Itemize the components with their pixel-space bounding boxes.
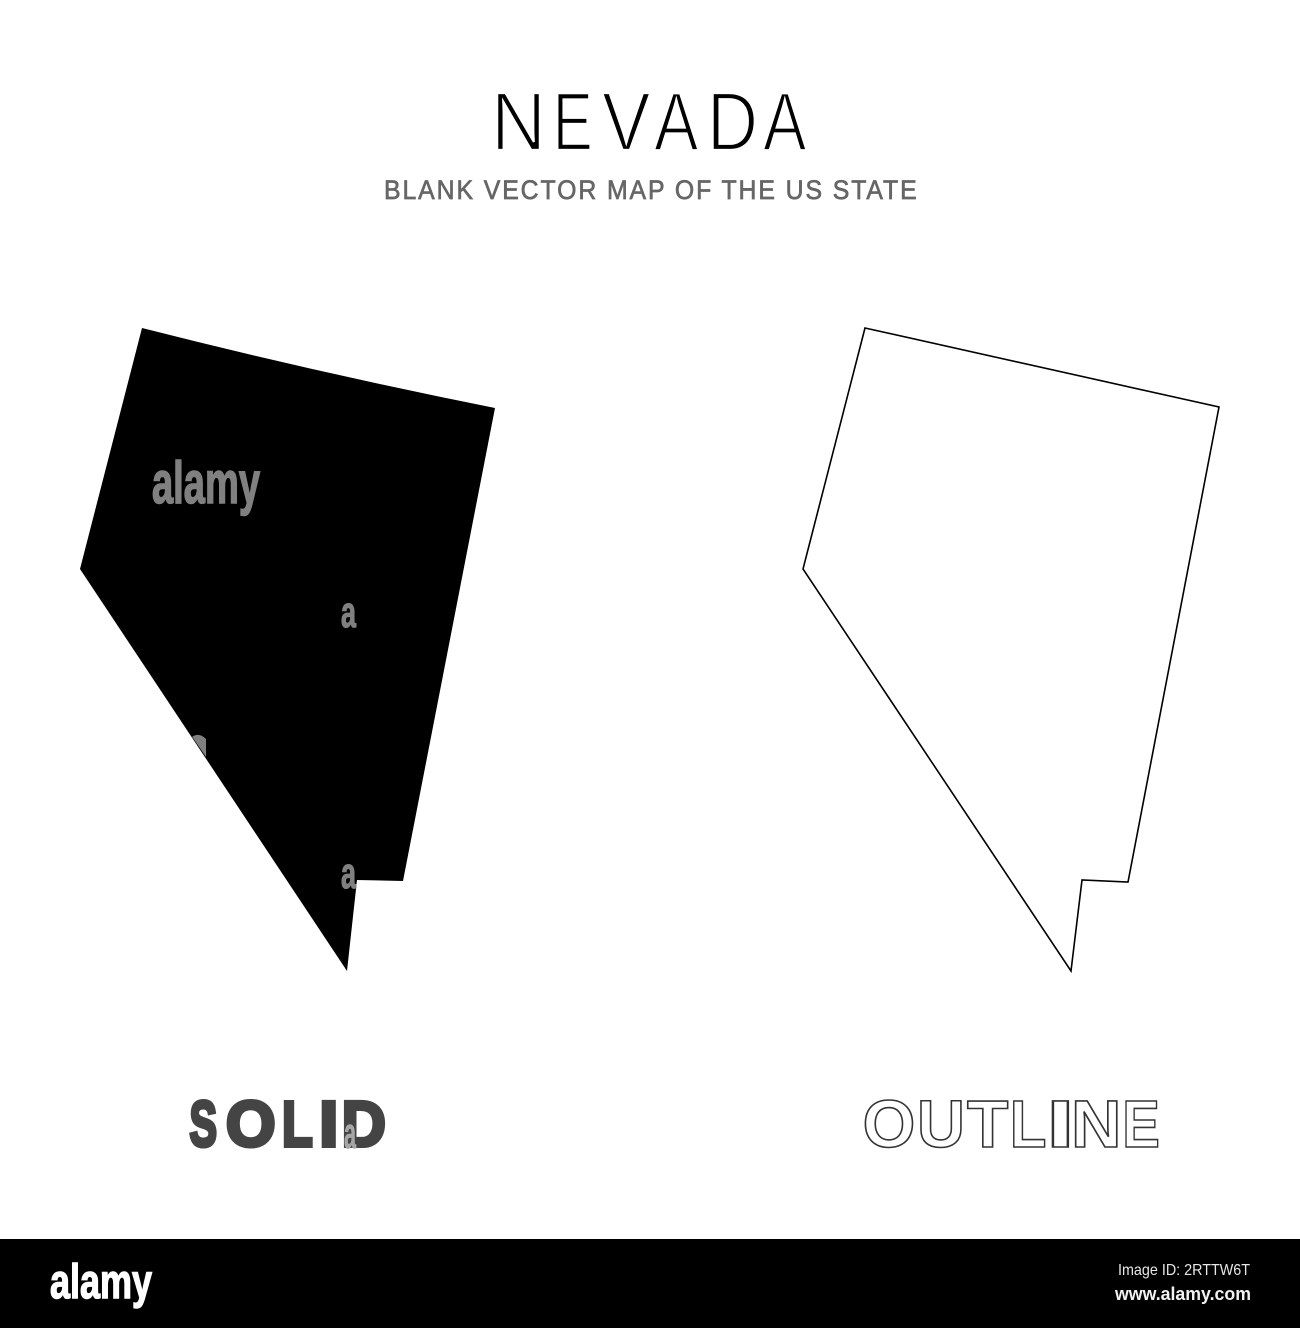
label: outline: E <box>1122 1087 1160 1162</box>
title: A <box>654 75 699 168</box>
title: E <box>553 75 593 168</box>
label: outline: U <box>917 1087 965 1162</box>
map: solid Nevada silhouette <box>80 328 495 971</box>
label: outline: T <box>967 1087 1008 1162</box>
label: solid: I <box>319 1088 338 1160</box>
label: outline: L <box>1010 1087 1046 1162</box>
watermark on solid map: alamy <box>152 450 260 516</box>
label: solid: L <box>282 1088 313 1160</box>
label: solid: D <box>342 1088 386 1160</box>
footer bar <box>0 1239 1300 1328</box>
label: solid: O <box>226 1088 276 1160</box>
subtitle: BLANK VECTOR MAP OF THE US STATE <box>384 176 917 205</box>
label: solid: S <box>190 1088 217 1160</box>
label: outline: N <box>1071 1087 1122 1162</box>
title: D <box>707 75 758 168</box>
title: A <box>763 75 807 168</box>
label: outline: O <box>863 1087 915 1162</box>
image id: Image ID: 2RTTW6T <box>1118 1262 1250 1279</box>
watermark on solid label: a <box>344 1109 356 1158</box>
watermark letter: a <box>341 849 356 898</box>
website: www.alamy.com <box>1114 1284 1251 1304</box>
footer logo: alamy <box>50 1256 152 1309</box>
watermark letter: a <box>341 588 356 637</box>
map: outline Nevada <box>803 328 1219 971</box>
title: N <box>491 75 546 168</box>
title: V <box>602 75 650 168</box>
label: outline: I <box>1046 1087 1075 1162</box>
watermark letter, clipped by map edge <box>192 735 206 757</box>
